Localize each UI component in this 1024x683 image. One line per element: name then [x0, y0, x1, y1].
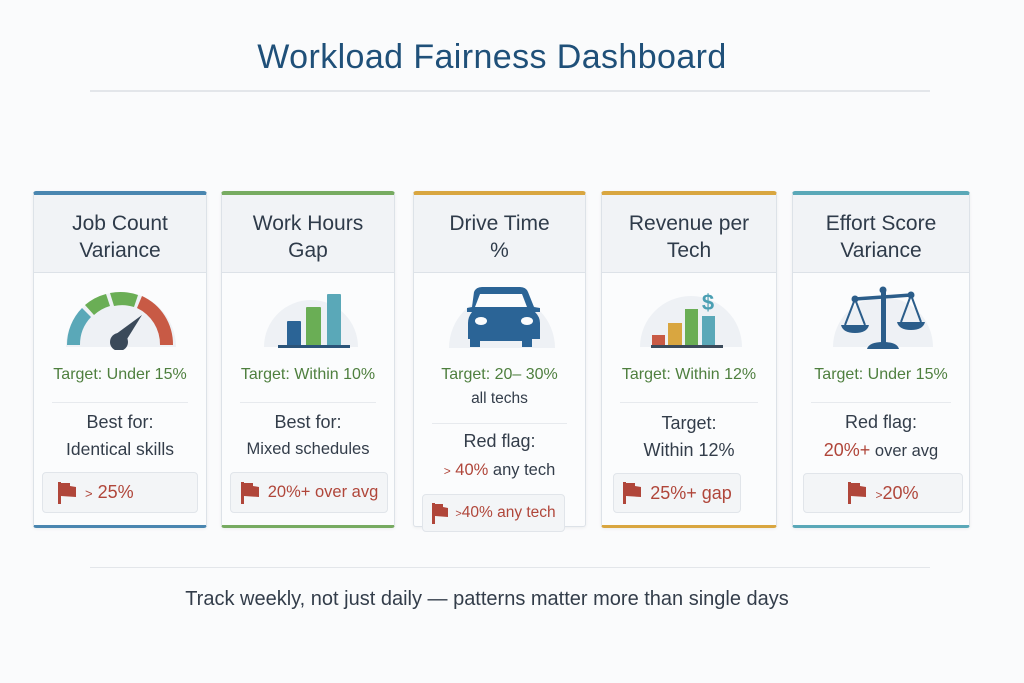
panel: revenue per tech: Target:: [661, 413, 717, 433]
target text: Target: Under 15%: [53, 366, 187, 383]
icon: car: [449, 287, 555, 348]
panel: revenue per tech: Target: Within 12%: [622, 366, 756, 383]
icon: bar chart: [264, 294, 358, 348]
panel: effort score variance: 20%+ over avg: [824, 440, 938, 460]
panel: drive time: > 40% any tech: [444, 461, 555, 479]
best for: Best for:: [86, 412, 154, 432]
icon: scales: [833, 286, 933, 349]
title: Workload Fairness Dashboard: [257, 38, 727, 76]
panel: drive time: Red flag:: [463, 431, 536, 451]
red flag box: > 25%: [85, 482, 134, 502]
panel: drive time: %: [490, 239, 509, 262]
panel: effort score variance: Variance: [840, 239, 922, 262]
panel: work hours gap: 20%+ over avg: [268, 483, 378, 501]
panel: effort score variance: Target: Under 15%: [814, 366, 948, 383]
panel: work hours gap: Gap: [288, 239, 328, 262]
panel: effort score variance: Effort Score: [826, 212, 936, 235]
panel: revenue per tech: 25%+ gap: [650, 482, 732, 502]
panel: work hours gap: Mixed schedules: [247, 440, 369, 458]
panel: revenue per tech: [601, 191, 777, 528]
heading: Job Count: [72, 212, 168, 235]
icon: revenue bars: $: [702, 290, 714, 315]
panel: drive time: [413, 191, 586, 527]
icon: revenue bars: [640, 290, 742, 348]
panel: effort score variance: Red flag:: [845, 412, 917, 432]
red flag box: [42, 472, 198, 513]
panel: drive time: all techs: [471, 390, 528, 407]
panel: drive time: Drive Time: [449, 212, 550, 235]
panel: revenue per tech: Tech: [667, 239, 711, 262]
panel: job count variance: [33, 191, 207, 528]
panel: job count variance: Identical skills: [66, 439, 174, 459]
panel: work hours gap: Work Hours: [253, 212, 363, 235]
panel: revenue per tech: Revenue per: [629, 212, 749, 235]
panel: drive time: Target: 20– 30%: [441, 366, 558, 383]
panel: effort score variance: >20%: [875, 482, 919, 502]
heading: Variance: [79, 239, 161, 262]
heading: [34, 195, 206, 273]
panel: work hours gap: Target: Within 10%: [241, 366, 375, 383]
panel: drive time: >40% any tech: [455, 504, 556, 521]
footer note: Track weekly, not just daily — patterns matter more than single days: [185, 588, 789, 610]
panel: work hours gap: [221, 191, 395, 528]
icon: gauge: [66, 292, 176, 350]
panel: effort score variance: [792, 191, 970, 528]
panel: work hours gap: Best for:: [274, 412, 342, 432]
panel: revenue per tech: Within 12%: [643, 440, 735, 460]
